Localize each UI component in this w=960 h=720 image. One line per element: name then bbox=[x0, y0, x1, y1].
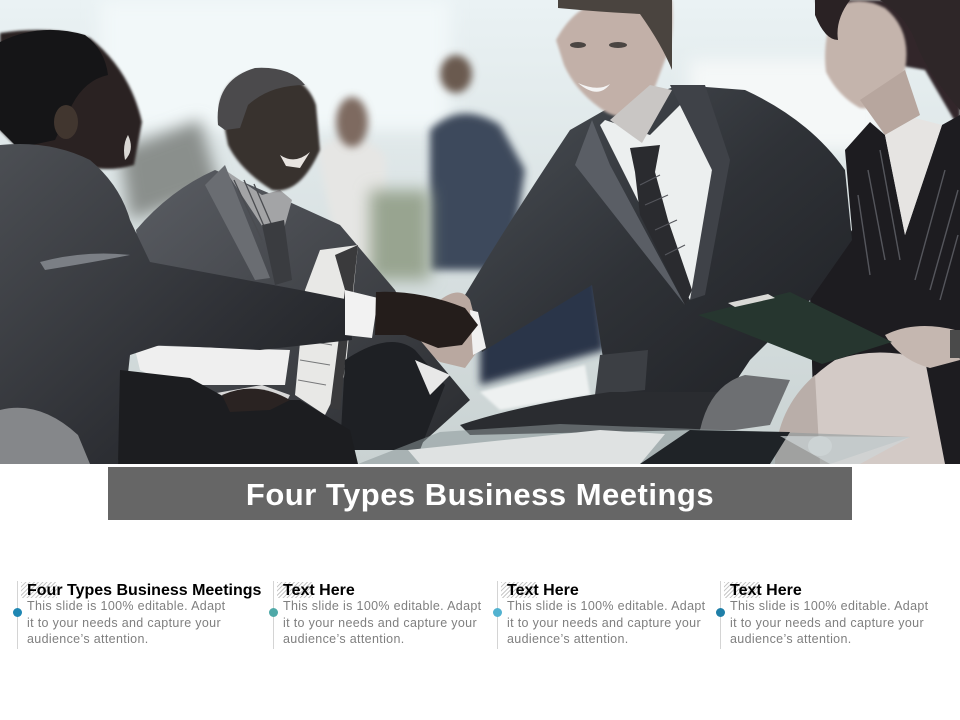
body text 4: it to your needs and capture your bbox=[730, 616, 924, 630]
man with tie, centre right bbox=[418, 0, 852, 435]
hatch accent 1 bbox=[21, 582, 57, 598]
text block 1 bbox=[17, 581, 243, 649]
hatch accent 3 bbox=[501, 582, 537, 598]
body text 4 bbox=[730, 599, 928, 646]
heading 1: Four Types Business Meetings bbox=[27, 582, 261, 599]
hatch accent 4 bbox=[724, 582, 760, 598]
heading 2: Text Here bbox=[283, 582, 355, 599]
blurred background bbox=[0, 0, 960, 464]
body text 1: it to your needs and capture your bbox=[27, 616, 221, 630]
glass table bbox=[358, 424, 910, 464]
text block 3 bbox=[497, 581, 723, 649]
photo: business people shaking hands bbox=[0, 0, 960, 464]
woman on right bbox=[775, 0, 960, 464]
text block 4 bbox=[720, 581, 946, 649]
body text 2 bbox=[283, 599, 481, 646]
title banner: Four Types Business Meetings bbox=[246, 477, 714, 512]
heading 4: Text Here bbox=[730, 582, 802, 599]
man on left, extending hand bbox=[0, 30, 478, 464]
body text 1 bbox=[27, 599, 225, 646]
dot 3 bbox=[493, 608, 502, 617]
body text 2: This slide is 100% editable. Adapt bbox=[283, 599, 481, 613]
body text 3: This slide is 100% editable. Adapt bbox=[507, 599, 705, 613]
body text 2: it to your needs and capture your bbox=[283, 616, 477, 630]
man in centre, seated bbox=[134, 68, 470, 450]
body text 2: audience’s attention. bbox=[283, 632, 405, 646]
heading 3: Text Here bbox=[507, 582, 579, 599]
dot 4 bbox=[716, 608, 725, 617]
body text 4: This slide is 100% editable. Adapt bbox=[730, 599, 928, 613]
body text 3 bbox=[507, 599, 705, 646]
body text 1: audience’s attention. bbox=[27, 632, 149, 646]
dot 2 bbox=[269, 608, 278, 617]
body text 1: This slide is 100% editable. Adapt bbox=[27, 599, 225, 613]
dot 1 bbox=[13, 608, 22, 617]
body text 3: it to your needs and capture your bbox=[507, 616, 701, 630]
clipboard bbox=[698, 292, 892, 364]
title banner bbox=[108, 467, 852, 520]
hatch accent 2 bbox=[277, 582, 313, 598]
body text 4: audience’s attention. bbox=[730, 632, 852, 646]
text block 2 bbox=[273, 581, 499, 649]
body text 3: audience’s attention. bbox=[507, 632, 629, 646]
